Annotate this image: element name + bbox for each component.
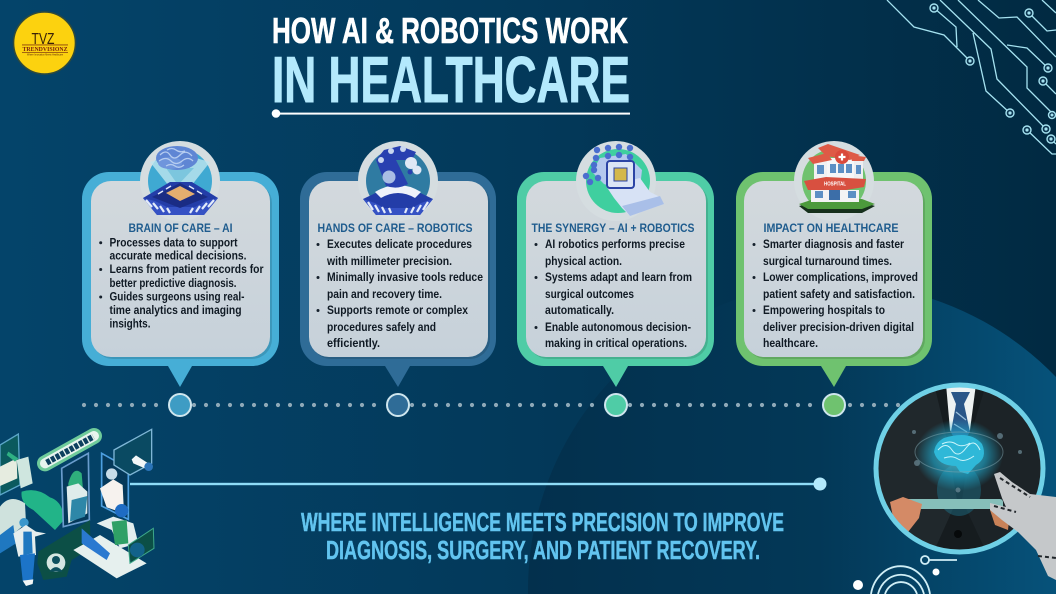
title: IN HEALTHCARE (272, 43, 630, 116)
bullet list: healthcare. (763, 338, 818, 350)
decorative rings (853, 556, 957, 594)
title: HOW AI & ROBOTICS WORK (272, 10, 628, 51)
bullet list: Learns from patient records for (110, 264, 264, 276)
bullet list: accurate medical decisions. (110, 250, 246, 262)
bullet list (752, 239, 918, 350)
bullet list: with millimeter precision. (326, 256, 452, 268)
bullet list: pain and recovery time. (327, 289, 442, 301)
icon: robot arm (363, 146, 433, 215)
bullet list (534, 239, 692, 350)
icon: brain on chip (143, 146, 218, 215)
heading: BRAIN OF CARE – AI (128, 223, 232, 235)
bullet list: Processes data to support (110, 238, 238, 250)
heading: THE SYNERGY – AI + ROBOTICS (532, 223, 695, 235)
bullet list: Executes delicate procedures (327, 239, 472, 251)
bullet list: patient safety and satisfaction. (763, 289, 915, 301)
bullet list: procedures safely and (327, 322, 436, 334)
bullet list: physical action. (545, 256, 622, 268)
bullet list: efficiently. (327, 338, 380, 350)
panel: impact on healthcare (736, 141, 932, 387)
bullet list: Lower complications, improved (763, 272, 918, 284)
bullet list: surgical turnaround times. (763, 256, 892, 268)
circuit decoration (887, 0, 1056, 154)
icon: robot hand with chip (583, 144, 664, 216)
bullet list: Systems adapt and learn from (545, 272, 692, 284)
icon: hospital building (799, 144, 875, 213)
illustration: telemedicine team (0, 429, 154, 586)
heading: HANDS OF CARE – ROBOTICS (318, 223, 473, 235)
connector line (130, 478, 826, 490)
bullet list: insights. (110, 318, 150, 330)
footer message: DIAGNOSIS, SURGERY, AND PATIENT RECOVERY. (326, 535, 760, 565)
bullet list (99, 238, 264, 330)
panel: the synergy (517, 141, 714, 387)
icon: robot hand (990, 472, 1056, 580)
heading: IMPACT ON HEALTHCARE (764, 223, 899, 235)
bullet list: Empowering hospitals to (763, 305, 885, 317)
bullet list: automatically. (545, 305, 614, 317)
bullet list (316, 239, 483, 350)
photo: executive holding glowing brain (870, 380, 1056, 580)
footer message: WHERE INTELLIGENCE MEETS PRECISION TO IMPROVE (301, 507, 784, 537)
panel: hands of care (300, 141, 496, 387)
bullet list: deliver precision-driven digital (763, 322, 914, 334)
bullet list: AI robotics performs precise (545, 239, 685, 251)
icon: hospital building: HOSPITAL (824, 182, 846, 188)
logo (14, 12, 76, 74)
bullet list: Guides surgeons using real- (110, 292, 245, 304)
logo: Where Innovation Meets Healthcare (27, 52, 63, 56)
bullet list: making in critical operations. (545, 338, 687, 350)
title underline (272, 109, 630, 118)
title (272, 10, 630, 116)
timeline nodes (169, 394, 845, 416)
panel: brain of care (82, 141, 279, 387)
bullet list: better predictive diagnosis. (110, 278, 236, 290)
bullet list: Enable autonomous decision- (545, 322, 691, 334)
footer message (301, 507, 784, 565)
bullet list: Supports remote or complex (327, 305, 469, 317)
logo: TVZ (32, 31, 55, 48)
logo: TRENDVISIONZ (22, 47, 68, 53)
bullet list: surgical outcomes (545, 289, 634, 301)
timeline dots (82, 403, 900, 407)
bullet list: Minimally invasive tools reduce (327, 272, 483, 284)
bullet list: time analytics and imaging (110, 305, 242, 317)
bullet list: Smarter diagnosis and faster (763, 239, 904, 251)
